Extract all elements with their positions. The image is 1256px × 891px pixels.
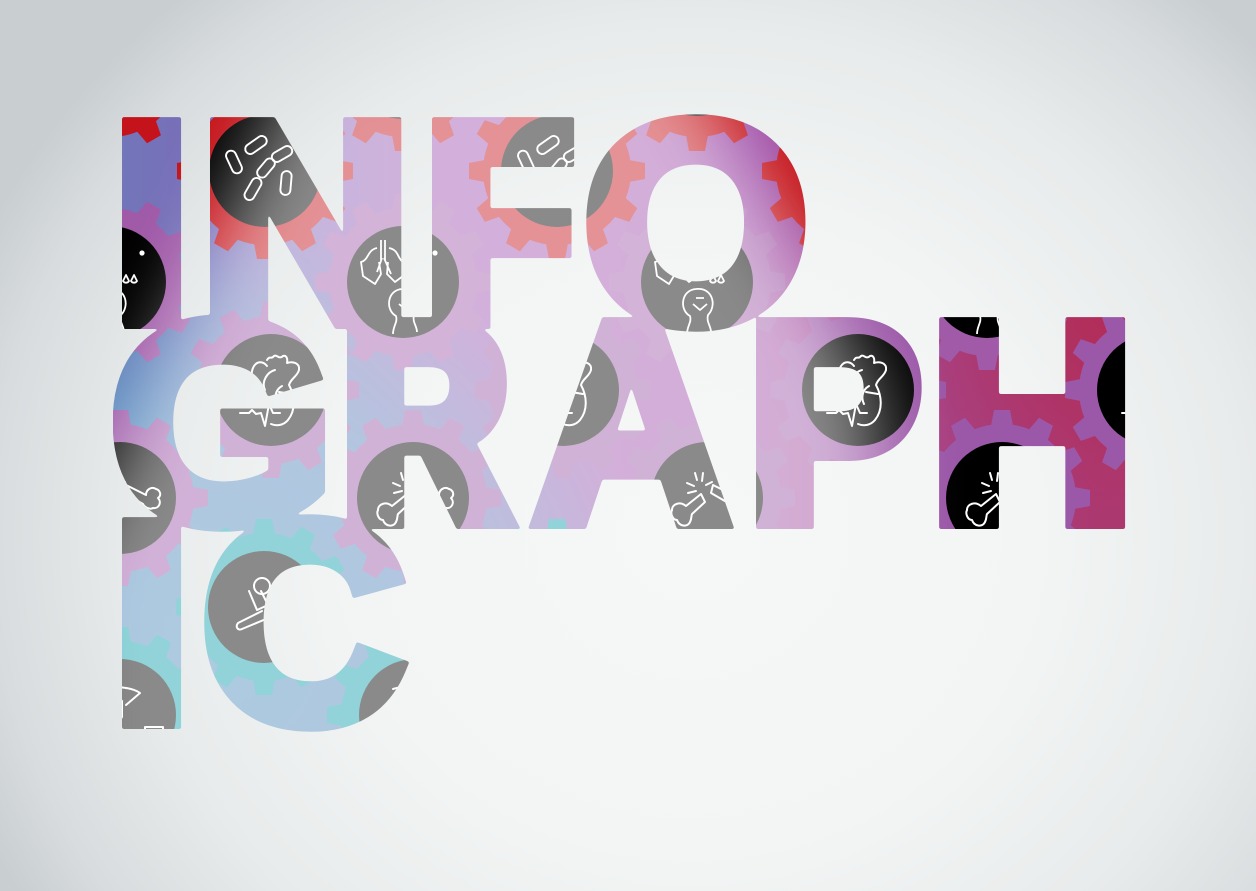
gears: top red rows	[122, 114, 806, 259]
colour field	[100, 100, 1140, 740]
gears: purple rows two and three	[113, 302, 1126, 586]
icon discs	[114, 114, 1126, 729]
title: INFOGRAPHIC lettering filled with gear pattern	[113, 114, 1126, 732]
gears: teal rows	[122, 519, 567, 729]
gear pattern clipped to the letters	[113, 114, 1126, 732]
pale veil over the centre	[113, 114, 920, 732]
gears: purple row one	[22, 194, 1075, 370]
